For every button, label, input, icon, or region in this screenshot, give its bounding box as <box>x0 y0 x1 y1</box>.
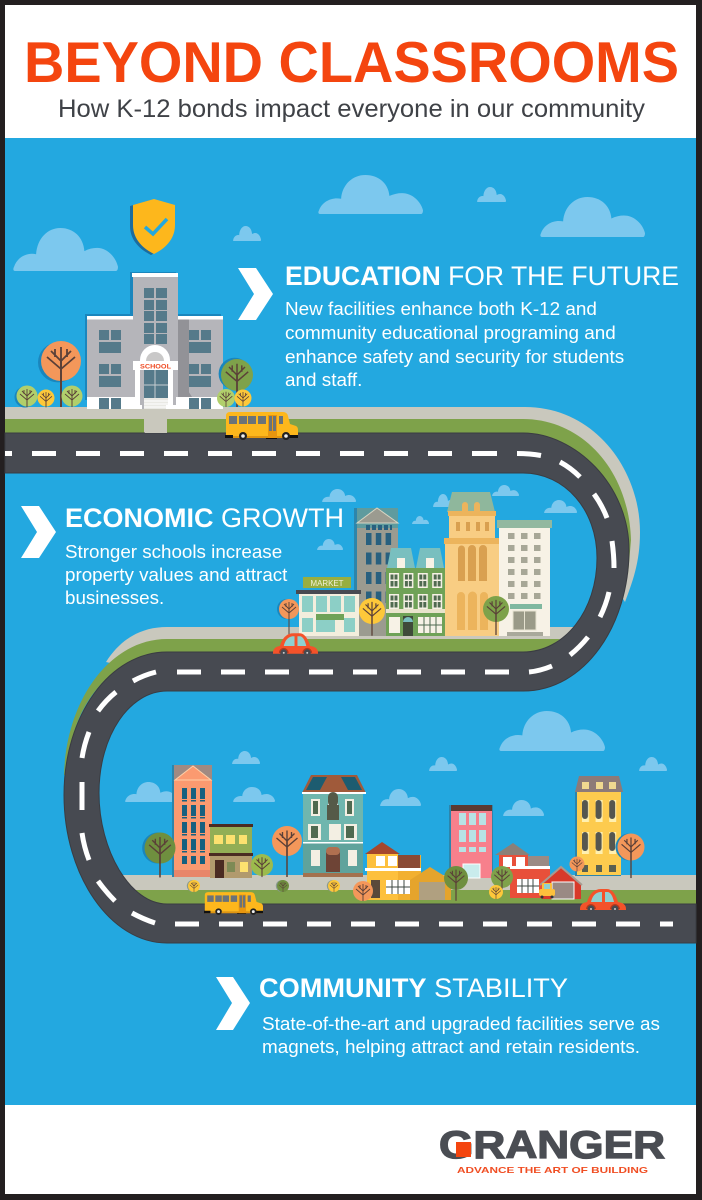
footer panel <box>5 1105 696 1194</box>
arrow: community stability <box>216 977 250 1030</box>
yellow taxi <box>539 883 555 898</box>
sidewalks and grass along the road <box>5 407 696 906</box>
title: BEYOND CLASSROOMS <box>24 31 679 95</box>
market <box>296 577 361 636</box>
red house and garage <box>495 843 582 899</box>
text: education: and staff. <box>285 370 362 391</box>
school building <box>85 272 223 409</box>
text: education: New facilities enhance both K-12 and <box>285 299 597 320</box>
white tower <box>497 520 552 636</box>
downtown trees <box>277 596 509 636</box>
text: community stability: State-of-the-art and upgraded facilities serve as <box>262 1014 660 1035</box>
trees at school <box>14 341 253 408</box>
teal house <box>302 775 366 877</box>
yellow house and garage <box>365 842 451 900</box>
subtitle: How K-12 bonds impact everyone in our community <box>58 95 645 123</box>
header panel <box>5 5 696 138</box>
icon: safety shield <box>130 199 175 255</box>
sky background <box>5 138 696 1105</box>
text: education: community educational programing and <box>285 323 616 344</box>
green building <box>386 548 445 636</box>
text: economic growth: property values and attract <box>65 564 288 585</box>
arrow: education <box>238 268 273 320</box>
yellow tower <box>444 492 500 636</box>
school bus on road <box>204 892 263 915</box>
text: community stability <box>262 1014 660 1058</box>
arrow: economic growth <box>21 506 56 558</box>
school walkway <box>145 407 167 433</box>
clouds <box>13 175 667 816</box>
corner shop <box>209 824 253 878</box>
school bus <box>225 412 298 440</box>
neighborhood trees <box>142 826 645 901</box>
logo: Granger: ADVANCE THE ART OF BUILDING <box>457 1165 649 1175</box>
neighborhood buildings <box>142 765 645 901</box>
text: education: enhance safety and security for students <box>285 347 624 368</box>
road <box>5 433 696 943</box>
heading: education: EDUCATION FOR THE FUTURE <box>285 261 679 291</box>
text: community stability: magnets, helping attract and retain residents. <box>262 1037 640 1058</box>
logo: Granger: GRANGER <box>439 1124 665 1167</box>
school building: SCHOOL <box>140 363 171 370</box>
heading: community stability: COMMUNITY STABILITY <box>259 973 568 1003</box>
downtown buildings <box>277 492 552 636</box>
yellow tower house <box>575 776 623 876</box>
market: MARKET <box>310 578 344 588</box>
grey tower <box>354 508 398 636</box>
text: economic growth: businesses. <box>65 587 164 608</box>
road lane markings <box>5 454 673 924</box>
heading: economic growth: ECONOMIC GROWTH <box>65 503 344 533</box>
pink building <box>449 805 493 878</box>
red car on road <box>580 889 626 913</box>
red car <box>273 633 318 656</box>
text: economic growth: Stronger schools increase <box>65 541 282 562</box>
coral tower <box>172 765 212 877</box>
text: education <box>285 299 624 391</box>
text: economic growth <box>65 541 288 608</box>
